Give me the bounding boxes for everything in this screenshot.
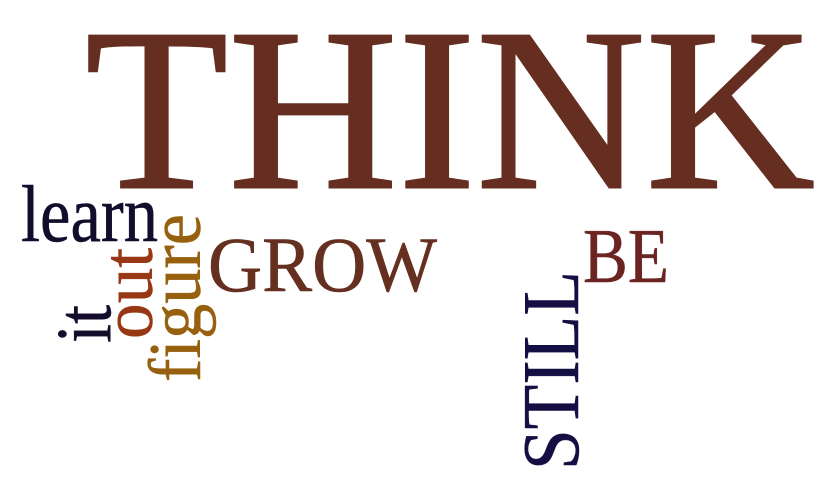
- word: figure: figure: [135, 214, 217, 382]
- word: it: it: [40, 305, 127, 343]
- word: out: out: [88, 248, 168, 339]
- word: learn: learn: [21, 171, 158, 259]
- word: BE: BE: [583, 213, 669, 299]
- word: GROW: GROW: [208, 221, 437, 308]
- word: STILL: STILL: [508, 271, 596, 470]
